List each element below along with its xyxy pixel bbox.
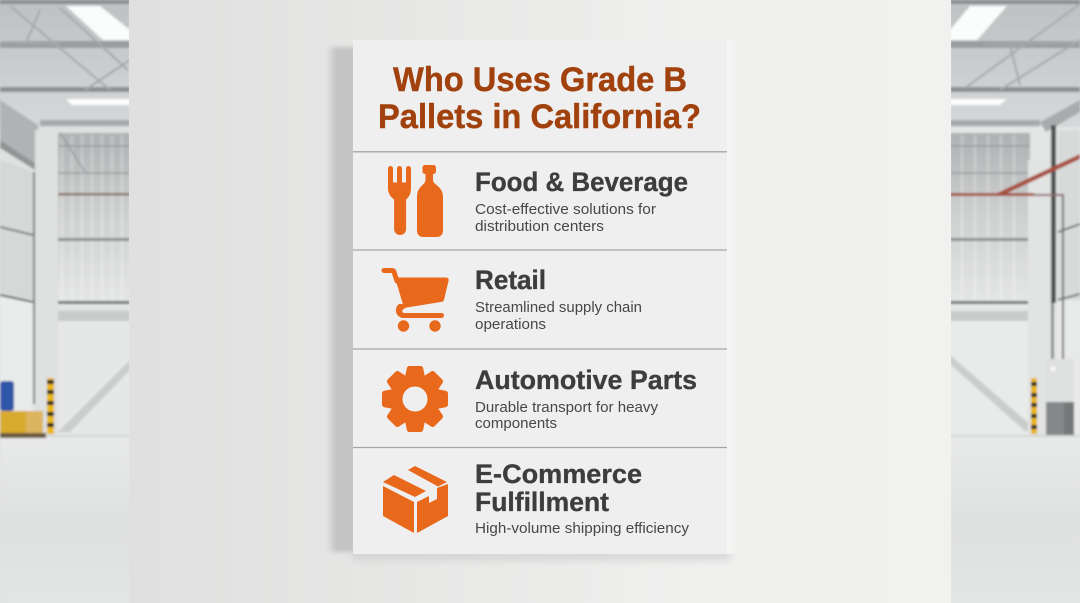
row: e-commerce fulfillment [353, 448, 727, 537]
icon: cardboard box [383, 466, 448, 533]
description: Retail [475, 300, 642, 333]
description: Retail: operations [475, 317, 546, 333]
panel shadow [326, 40, 739, 560]
heading: E-Commerce Fulfillment [475, 459, 642, 517]
description: Food & Beverage: distribution centers [475, 219, 604, 235]
title: Who Uses Grade B [393, 61, 687, 99]
background: right warehouse scene [950, 0, 1080, 603]
description: Automotive Parts [475, 400, 659, 432]
heading: Food & Beverage: Food & Beverage [475, 167, 688, 197]
icon: gear [382, 366, 448, 432]
description: Automotive Parts: Durable transport for heavy [475, 400, 659, 416]
description: Retail: Streamlined supply chain [475, 300, 642, 316]
icon: shopping cart [384, 270, 449, 332]
title: Pallets in California? [378, 98, 701, 136]
row: retail [353, 250, 727, 333]
title [378, 61, 701, 136]
heading: Retail: Retail [475, 265, 546, 295]
heading: E-Commerce Fulfillment: E-Commerce [475, 459, 642, 489]
description: E-Commerce Fulfillment: High-volume shipping efficiency [475, 521, 690, 537]
description: Food & Beverage: Cost-effective solutions for [475, 202, 656, 218]
background: central white wall [129, 0, 951, 603]
icon: fork and bottle [388, 165, 443, 237]
description: Automotive Parts: components [475, 416, 557, 432]
panel: who uses grade B pallets [353, 40, 727, 554]
row: automotive parts [353, 349, 727, 432]
background: left warehouse scene [0, 0, 130, 603]
row: food and beverage [353, 152, 727, 237]
description: Food & Beverage [475, 202, 656, 235]
heading: E-Commerce Fulfillment: Fulfillment [475, 487, 609, 517]
heading: Automotive Parts: Automotive Parts [475, 365, 697, 395]
